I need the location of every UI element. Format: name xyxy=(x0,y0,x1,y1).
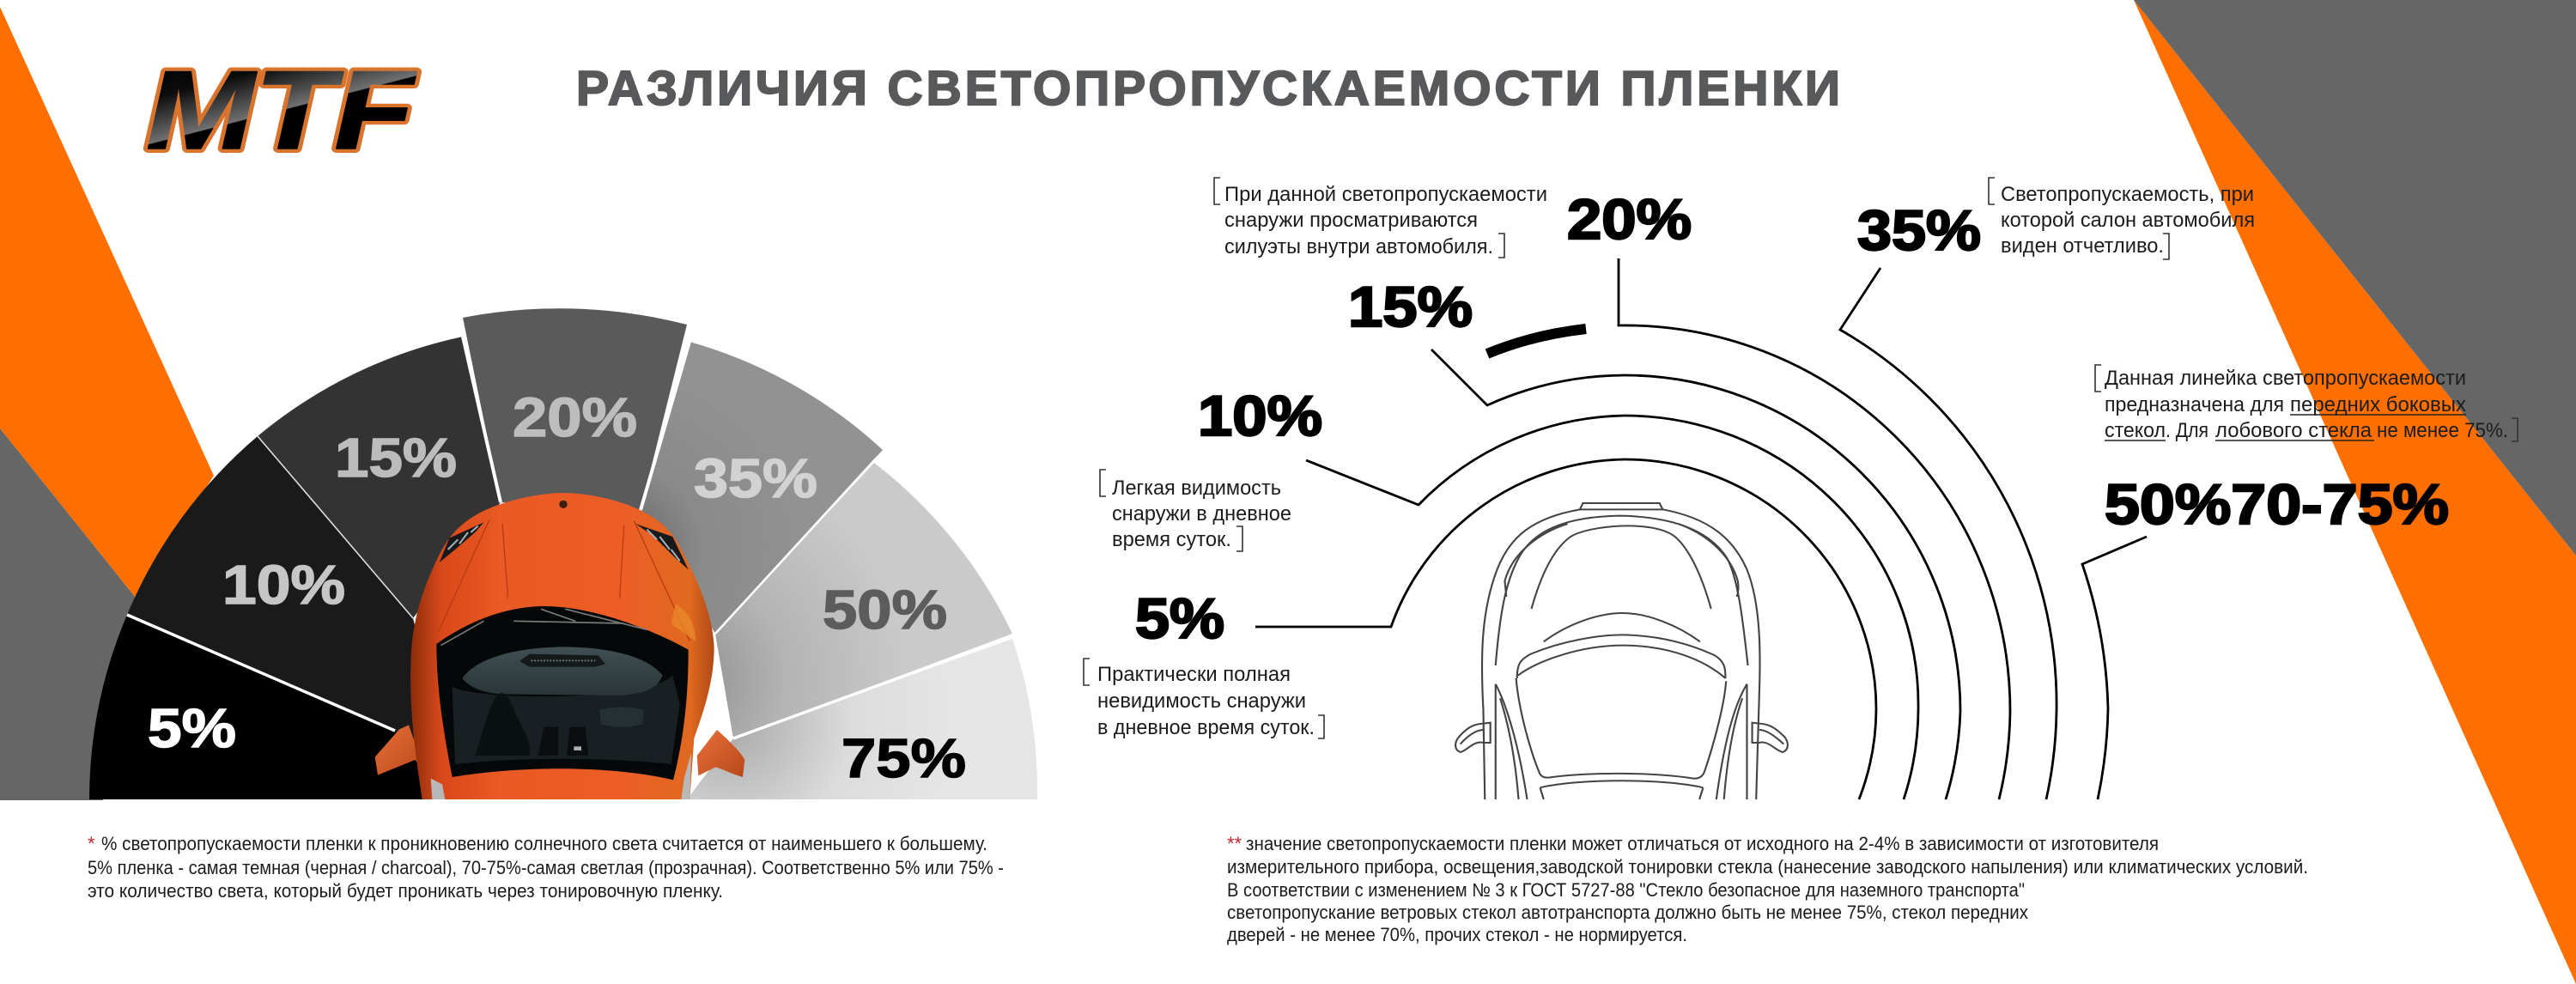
footnote right: измерительного прибора, освещения,заводской тонировки стекла (нанесение заводского напыления) или климатических условий. xyxy=(1227,856,2308,878)
footnote right xyxy=(1227,833,2308,945)
callout: front side windows note: не менее 75%. xyxy=(2377,419,2508,442)
wedge 75% xyxy=(687,639,1037,799)
diagram: tint arcs around car xyxy=(1255,258,2147,799)
footnote right: значение светопропускаемости пленки может отличаться от исходного на 2-4% в зависимости от изготовителя xyxy=(1246,833,2159,854)
callout: 35% note: виден отчетливо. xyxy=(2001,234,2164,258)
callout: 5% note: Практически полная xyxy=(1097,663,1291,686)
footnote right: дверей - не менее 70%, прочих стекол - не нормируется. xyxy=(1227,924,1687,945)
logo: MTF: MTF xyxy=(146,47,417,173)
callout: front side windows note: предназначена для xyxy=(2105,393,2284,416)
wedge 20% xyxy=(463,308,687,510)
callout: 5% note: невидимость снаружи xyxy=(1097,689,1306,713)
heading 5%: 5% xyxy=(1135,586,1224,650)
callout: 35% note: Светопропускаемость, при xyxy=(2001,183,2254,206)
callout: 35% note xyxy=(1989,178,2255,259)
footnote right: ** xyxy=(1227,833,1242,854)
callout: 10% note: снаружи в дневное xyxy=(1112,502,1291,525)
left mirror xyxy=(375,725,426,775)
callout: front side windows note: Данная линейка светопропускаемости xyxy=(2105,367,2466,390)
fan chart: tint levels xyxy=(89,308,1037,799)
car outline drawing xyxy=(1455,503,1788,799)
hood vent left xyxy=(440,522,483,562)
callout: front side windows note: . Для xyxy=(2166,419,2208,442)
logo: MTF: MTF xyxy=(146,47,417,173)
wedge 35% xyxy=(641,342,883,634)
callout: front side windows note: стекол xyxy=(2105,419,2166,442)
decorative gray stripe left xyxy=(0,428,135,800)
label 15%: 15% xyxy=(335,427,457,489)
callout: 10% note: время суток. xyxy=(1112,528,1231,551)
heading 35%: 35% xyxy=(1857,198,1981,262)
right mirror xyxy=(697,730,744,777)
callout: front side windows note: передних боковых xyxy=(2290,393,2466,416)
decorative orange stripe left xyxy=(0,7,214,597)
wedge 10% xyxy=(127,436,447,756)
title: РАЗЛИЧИЯ СВЕТОПРОПУСКАЕМОСТИ ПЛЕНКИ xyxy=(576,61,1840,116)
footnote left: * xyxy=(88,833,95,854)
callout: front side windows note: лобового стекла xyxy=(2215,419,2372,442)
footnote right: светопропускание ветровых стекол автотранспорта должно быть не менее 75%, стекол передних xyxy=(1227,902,2028,923)
arc 10% xyxy=(1306,416,1918,799)
heading 15%: 15% xyxy=(1348,275,1473,338)
footnote left: это количество света, который будет проникать через тонировочную пленку. xyxy=(88,880,723,902)
callout: 35% note: которой салон автомобиля xyxy=(2001,209,2255,232)
cabin xyxy=(453,676,680,764)
decorative gray stripe right xyxy=(2134,0,2576,556)
label 75%: 75% xyxy=(841,727,966,789)
dashboard xyxy=(462,647,663,695)
seats xyxy=(475,693,530,756)
wedge 15% xyxy=(258,337,501,618)
arc 50-75% xyxy=(2082,537,2147,799)
dashboard vent xyxy=(519,654,605,667)
arc 15% xyxy=(1431,349,1960,799)
thick dash mark xyxy=(1487,329,1586,354)
callout: front side windows note xyxy=(2095,365,2518,442)
label 20%: 20% xyxy=(513,386,637,448)
callout: 20% note: снаружи просматриваются xyxy=(1224,209,1478,232)
label 35%: 35% xyxy=(694,447,817,509)
decorative orange stripe right xyxy=(2134,0,2576,984)
callout: 5% note xyxy=(1084,659,1324,739)
callout: 10% note xyxy=(1100,470,1291,551)
wipers xyxy=(440,609,647,646)
label 50%: 50% xyxy=(823,579,947,641)
windshield xyxy=(436,606,689,780)
arc 35% xyxy=(1840,268,2057,799)
hood vent right xyxy=(635,524,689,569)
heading 10%: 10% xyxy=(1198,384,1322,447)
heading 50% 70-75%: 50%70-75% xyxy=(2105,472,2449,536)
orange car photo illustration xyxy=(375,493,744,799)
callout: 10% note: Легкая видимость xyxy=(1112,477,1281,500)
callout: 20% note: силуэты внутри автомобиля. xyxy=(1224,235,1493,258)
wedge 50% xyxy=(715,463,1012,738)
footnote left: % светопропускаемости пленки к проникновению солнечного света считается от наименьшего к большему. xyxy=(101,833,987,854)
heading 20%: 20% xyxy=(1567,187,1692,251)
car body xyxy=(410,493,714,799)
arc 20% xyxy=(1619,258,2010,799)
wedge 5% xyxy=(89,615,532,799)
callout: 5% note: в дневное время суток. xyxy=(1097,716,1315,739)
front camera xyxy=(559,501,568,508)
label 5%: 5% xyxy=(148,697,236,759)
footnote left xyxy=(88,833,1004,902)
label 10%: 10% xyxy=(222,554,345,616)
footnote left: 5% пленка - самая темная (черная / charcoal), 70-75%-самая светлая (прозрачная). Соответственно 5% или 75% - xyxy=(88,857,1004,878)
callout: 20% note xyxy=(1214,178,1547,258)
footnote right: В соответствии с изменением № 3 к ГОСТ 5727-88 "Стекло безопасное для наземного транспорта" xyxy=(1227,879,2025,901)
callout: 20% note: При данной светопропускаемости xyxy=(1224,183,1547,206)
arc 5% xyxy=(1255,459,1876,799)
